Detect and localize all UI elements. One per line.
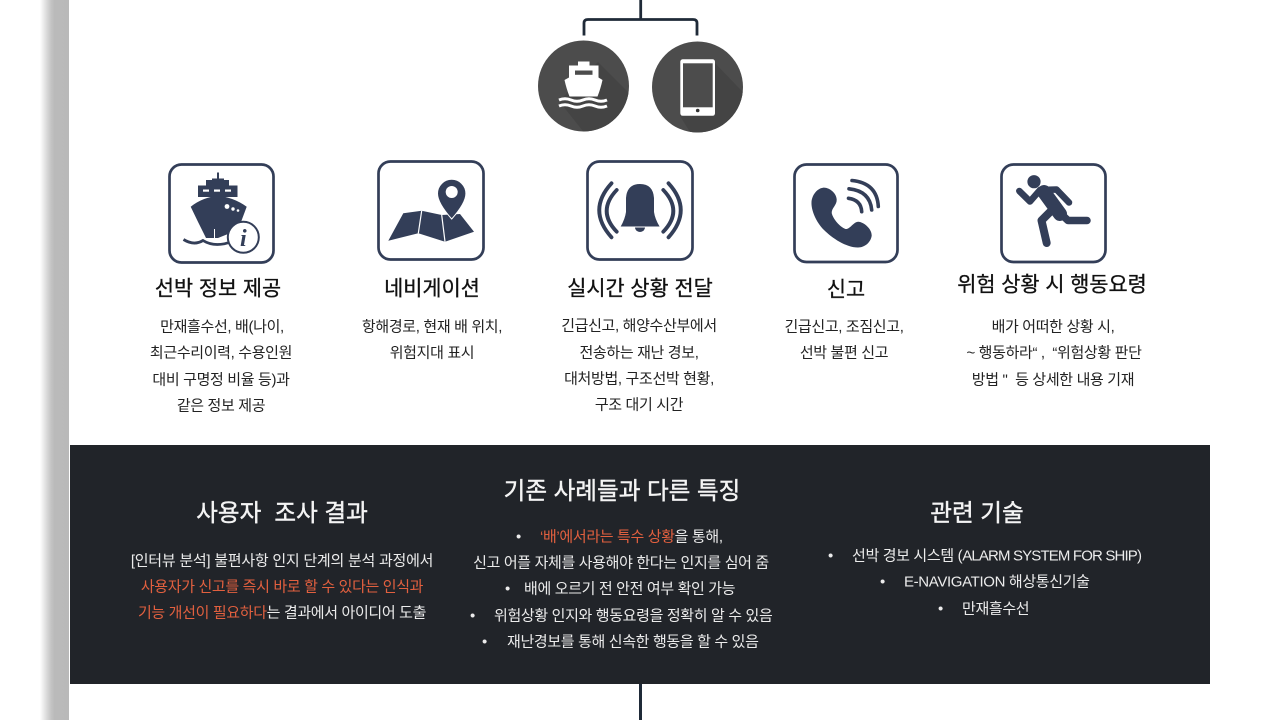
- icon: ship with info badge: [168, 163, 275, 264]
- icon: ship with info badge: i: [240, 226, 247, 252]
- bullet list: •: [938, 600, 943, 618]
- bullet list: •: [880, 574, 885, 590]
- panel: dark summary: [70, 445, 1210, 684]
- body text: 사용자가 신고를 즉시 바로 할 수 있다는 인식과: [141, 578, 423, 596]
- body text: [인터뷰 분석] 불편사항 인지 단계의 분석 과정에서: [131, 552, 433, 570]
- heading: 기존 사례들과 다른 특징: [504, 479, 740, 505]
- description: [362, 318, 502, 362]
- description: 구조 대기 시간: [595, 396, 683, 414]
- bullet list: 신고 어플 자체를 사용해야 한다는 인지를 심어 줌: [473, 554, 769, 572]
- bullet list: [828, 548, 1142, 618]
- bullet list: •: [482, 634, 487, 650]
- body text: [131, 552, 433, 622]
- description: 긴급신고, 해양수산부에서: [561, 318, 717, 334]
- heading: 선박 정보 제공: [155, 278, 281, 301]
- description: 대비 구명정 비율 등)과: [152, 372, 290, 388]
- description: 배가 어떠한 상황 시,: [992, 318, 1114, 336]
- bullet list: ‘배’에서라는 특수 상황을 통해,: [540, 528, 723, 546]
- bullet list: E-NAVIGATION 해상통신기술: [904, 574, 1090, 590]
- description: 항해경로, 현재 배 위치,: [362, 318, 502, 336]
- heading: 실시간 상황 전달: [567, 278, 713, 301]
- bullet list: 위험상황 인지와 행동요령을 정확히 알 수 있음: [494, 608, 772, 624]
- description: [966, 318, 1142, 388]
- description: 방법 " 등 상세한 내용 기재: [972, 372, 1134, 388]
- column: report: [784, 278, 904, 362]
- section: user research: [131, 500, 433, 622]
- bullet list: [470, 528, 772, 650]
- description: 최근수리이력, 수용인원: [150, 344, 292, 362]
- description: 전송하는 재난 경보,: [579, 344, 699, 362]
- heading: 관련 기술: [930, 501, 1024, 527]
- column: real-time alert: [561, 278, 717, 414]
- description: 선박 불편 신고: [800, 344, 888, 362]
- bullet list: •: [470, 608, 475, 624]
- bullet list: 배에 오르기 전 안전 여부 확인 가능: [524, 580, 735, 598]
- description: ~ 행동하라“ , “위험상황 판단: [966, 344, 1142, 362]
- bullet list: 재난경보를 통해 신속한 행동을 할 수 있음: [507, 634, 759, 650]
- connector: bottom line: [639, 684, 642, 720]
- heading: 위험 상황 시 행동요령: [957, 274, 1147, 297]
- description: 위험지대 표시: [390, 344, 474, 362]
- column: danger action guide: [957, 274, 1147, 388]
- connector: top branching line: [582, 0, 698, 36]
- bullet list: •: [516, 528, 521, 546]
- icon: ringing bell: [586, 160, 694, 261]
- bullet list: •: [505, 580, 510, 598]
- icon: map with pin: [377, 160, 485, 261]
- icon: smartphone in circle: [652, 42, 743, 132]
- heading: 네비게이션: [384, 278, 480, 301]
- icon: ship in circle: [538, 40, 629, 132]
- description: 같은 정보 제공: [177, 398, 265, 414]
- description: [561, 318, 717, 414]
- heading: 신고: [827, 279, 865, 302]
- description: [784, 318, 904, 362]
- bullet list: •: [828, 548, 833, 564]
- icon: phone call: [793, 163, 899, 264]
- column: navigation: [362, 278, 502, 362]
- icon: running person: [1000, 163, 1107, 264]
- bullet list: 만재흘수선: [962, 600, 1029, 618]
- body text: 기능 개선이 필요하다는 결과에서 아이디어 도출: [138, 604, 426, 622]
- description: [150, 318, 292, 414]
- description: 만재흘수선, 배(나이,: [160, 318, 284, 336]
- bullet list: 선박 경보 시스템 (ALARM SYSTEM FOR SHIP): [852, 548, 1142, 564]
- section: differences from existing cases: [470, 478, 772, 650]
- section: related technology: [828, 500, 1142, 618]
- description: 대처방법, 구조선박 현황,: [564, 370, 714, 388]
- column: ship info: [150, 278, 292, 414]
- left side shadow strip: [40, 0, 69, 720]
- description: 긴급신고, 조짐신고,: [784, 318, 904, 336]
- heading: 사용자 조사 결과: [196, 501, 368, 527]
